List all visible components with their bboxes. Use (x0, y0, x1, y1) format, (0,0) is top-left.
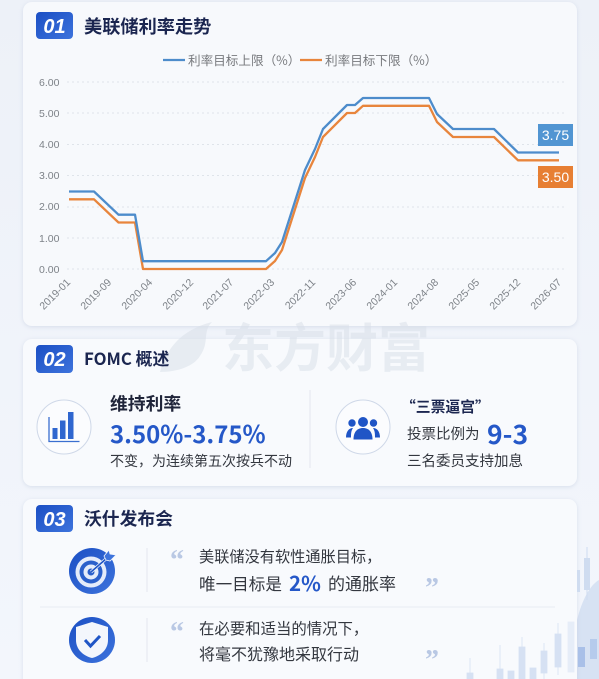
panel: interest rate trend (23, 2, 577, 326)
icon: people (336, 400, 390, 454)
vote ratio: 9-3 (487, 413, 528, 452)
x axis labels: 2020-12 (160, 277, 196, 312)
block: dissent vote (336, 396, 528, 471)
y axis labels: 1.00 (39, 233, 60, 245)
value tag 3.75 (538, 124, 573, 146)
y axis labels: 6.00 (39, 77, 60, 89)
y axis labels: 3.00 (39, 170, 60, 182)
figure: rate range: 3.50%-3.75% (110, 415, 266, 450)
note: members: 三名委员支持加息 (407, 450, 523, 471)
decoration: candlesticks (467, 622, 574, 679)
x axis labels: 2022-11 (283, 277, 318, 312)
label: hold rate: 维持利率 (110, 390, 181, 416)
quote 2: ” (425, 645, 439, 676)
y axis labels (39, 77, 60, 276)
quote 2: 将毫不犹豫地采取行动 (199, 641, 359, 665)
panel: Warsh press conference (23, 499, 577, 679)
x axis labels: 2019-01 (37, 277, 73, 312)
line chart (37, 77, 573, 312)
quote 1: 的通胀率 (328, 570, 396, 595)
x axis labels: 2025-05 (446, 277, 482, 312)
x axis labels: 2026-07 (528, 277, 564, 312)
x axis labels: 2022-03 (241, 277, 277, 312)
value tag 3.50: 3.50 (542, 169, 569, 185)
watermark: 东方财富 (222, 321, 430, 379)
y axis labels: 0.00 (39, 264, 60, 276)
icon: bar chart (37, 400, 91, 454)
quote 2: “ (170, 617, 184, 648)
quote 1: ” (425, 573, 439, 604)
upper bound line (69, 98, 559, 261)
icon: shield (69, 617, 115, 663)
decoration: right edge candlesticks (577, 547, 597, 667)
quote 1: 2% (289, 567, 321, 597)
heading: rate trend: 美联储利率走势 (84, 13, 211, 39)
quote 1 (170, 545, 439, 604)
block: hold rate (37, 390, 292, 471)
icon: target (69, 548, 116, 594)
x axis labels: 2021-07 (200, 277, 236, 312)
x axis labels: 2024-01 (364, 277, 400, 312)
legend (163, 50, 437, 69)
heading: press conference: 沃什发布会 (84, 505, 173, 531)
y axis labels: 5.00 (39, 108, 60, 120)
value tag 3.50 (538, 166, 573, 188)
vote ratio: 投票比例为 (407, 423, 480, 444)
x axis labels (37, 277, 564, 312)
section 03 badge (36, 505, 73, 532)
section 02 badge: 02 (43, 349, 66, 371)
quote 2: 在必要和适当的情况下， (199, 617, 368, 639)
section 03 badge: 03 (43, 509, 66, 531)
lower bound line (69, 106, 559, 269)
section 01 badge: 01 (43, 16, 66, 38)
legend: 利率目标下限（%） (325, 50, 437, 69)
x axis labels: 2019-09 (78, 277, 114, 312)
y axis labels: 2.00 (39, 201, 60, 213)
decoration: right side chart glow (577, 580, 599, 679)
vote ratio (407, 413, 528, 452)
x axis labels: 2024-08 (405, 277, 441, 312)
quote 1: 唯一目标是 (199, 571, 282, 595)
panel: FOMC overview (23, 321, 577, 486)
x axis labels: 2020-04 (119, 277, 155, 312)
legend: 利率目标上限（%） (188, 50, 300, 69)
heading: FOMC: FOMC 概述 (84, 346, 169, 370)
label: three dissent votes: “三票逼宫” (401, 396, 490, 417)
quote 1: 美联储没有软性通胀目标， (199, 545, 381, 567)
x axis labels: 2023-06 (323, 277, 359, 312)
y axis labels: 4.00 (39, 139, 60, 151)
section 02 badge (36, 345, 73, 373)
quote 1: “ (170, 545, 184, 576)
note: unchanged: 不变，为连续第五次按兵不动 (110, 451, 292, 471)
quote 2 (170, 617, 439, 676)
section 01 badge (36, 12, 73, 39)
value tag 3.75: 3.75 (542, 127, 569, 143)
x axis labels: 2025-12 (487, 277, 523, 312)
